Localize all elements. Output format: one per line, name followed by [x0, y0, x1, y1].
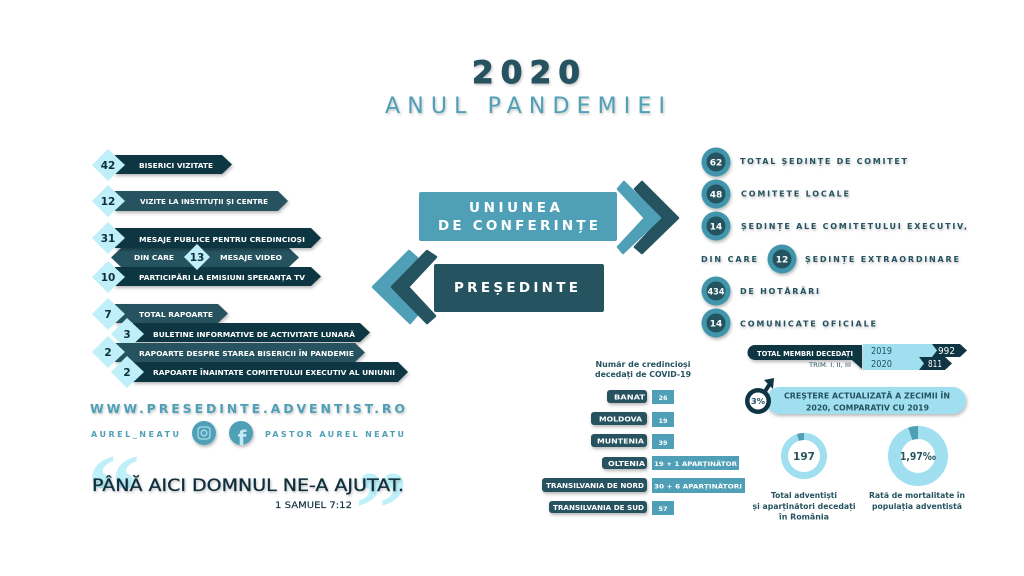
icon: up arrow circle: [745, 378, 774, 414]
stat: 62: 62: [710, 158, 722, 168]
panel: deceased members comparison: TRIM. I, II, III: [808, 362, 851, 369]
panel: reports: [92, 298, 408, 388]
arrow: right chevrons: [618, 182, 678, 253]
chart: donut 197: și aparținători decedați: [752, 502, 856, 512]
stat: 48: 48: [710, 190, 722, 200]
heading: regions: [595, 360, 691, 380]
quote: [87, 433, 408, 567]
stat: 434: DE HOTĂRÂRI: [740, 285, 819, 296]
heading: regions: decedați de COVID-19: [595, 370, 691, 380]
bar: rapoarte comitet: 2: [123, 367, 131, 379]
panel: deceased members comparison: TOTAL MEMBRI DECEDAȚI: [757, 350, 853, 359]
panel: uniunea de conferinte: UNIUNEA: [469, 200, 561, 216]
row: transilvania de sud: 57: [658, 505, 668, 513]
stat: 14 comunicate: [702, 308, 876, 338]
chart: donut 197: în România: [778, 512, 829, 522]
stat: 12 extraordinare: DIN CARE: [701, 255, 757, 264]
row: transilvania de nord: 30 + 6 APARȚINĂTORI: [654, 482, 742, 492]
title: [385, 55, 665, 119]
bar: rapoarte stare: 2: [104, 347, 112, 359]
row: transilvania de nord: [542, 478, 745, 493]
panel: deceased members comparison: [748, 344, 967, 370]
row: banat: [607, 390, 674, 404]
row: muntenia: [591, 434, 674, 449]
bar: participari: PARTICIPĂRI LA EMISIUNI SPERANȚA TV: [139, 273, 306, 283]
quote: PÂNĂ AICI DOMNUL NE-A AJUTAT.: [92, 474, 404, 496]
panel: deaths by region: [542, 360, 745, 515]
title: ANUL PANDEMIEI: [385, 94, 665, 119]
chart: donut 197: 197: [793, 451, 815, 463]
social links: [91, 421, 404, 450]
row: transilvania de sud: TRANSILVANIA DE SUD: [553, 504, 644, 512]
icon: facebook: f: [238, 426, 247, 450]
quote: ”: [355, 450, 408, 567]
stat: 14 comunicate: 14: [710, 320, 722, 330]
stat: 62: [702, 148, 908, 176]
title: 2020: [472, 55, 580, 91]
bar: rapoarte stare: RAPOARTE DESPRE STAREA BISERICII ÎN PANDEMIE: [139, 349, 354, 358]
stat: 14 sedinte: 14: [710, 222, 722, 232]
chart: donut 197: Total adventiști: [771, 491, 837, 501]
bar: din care mesaje video: DIN CARE: [134, 254, 174, 262]
bar: participari: 10: [101, 272, 115, 284]
chart: donut mortality: [869, 432, 965, 512]
badge: 13: [184, 244, 210, 270]
bar: biserici vizitate: BISERICI VIZITATE: [139, 162, 213, 170]
stat: 12 extraordinare: 12: [776, 256, 788, 266]
panel: deceased members comparison: 811: [928, 359, 942, 370]
row: transilvania de sud: [549, 501, 674, 515]
quote: 1 SAMUEL 7:12: [275, 501, 352, 511]
row: muntenia: MUNTENIA: [597, 438, 645, 446]
arrow: left chevrons: [373, 251, 436, 323]
row: oltenia: OLTENIA: [608, 460, 646, 468]
row: muntenia: 39: [658, 439, 668, 447]
social links: PASTOR AUREL NEATU: [265, 430, 404, 439]
row: moldova: [591, 412, 674, 427]
bar: vizite: 12: [101, 196, 115, 208]
panel: deceased members comparison: 2020: [871, 359, 892, 370]
bar: participari: [92, 261, 321, 293]
row: transilvania de nord: TRANSILVANIA DE NORD: [546, 482, 644, 490]
panel: presedinte: [373, 251, 604, 323]
panel: deceased members comparison: 2019: [871, 346, 892, 357]
bar: vizite: VIZITE LA INSTITUȚII ȘI CENTRE: [140, 198, 268, 207]
stat: 48: COMITETE LOCALE: [741, 190, 849, 198]
bar: total rapoarte: TOTAL RAPOARTE: [139, 311, 213, 319]
quote: “: [87, 433, 140, 550]
panel: presedinte: PREȘEDINTE: [454, 280, 578, 296]
bar: rapoarte comitet: [111, 356, 408, 388]
bar: biserici vizitate: [92, 149, 232, 181]
stat: 12 extraordinare: ȘEDINȚE EXTRAORDINARE: [805, 255, 959, 265]
icon: instagram: [192, 421, 216, 445]
badge: 13: 13: [190, 252, 204, 264]
stat: 14 sedinte: [702, 212, 967, 240]
bar: buletine: [111, 318, 370, 350]
bar: vizite: [92, 185, 288, 217]
bar: din care mesaje video: [111, 248, 299, 267]
website: WWW.PRESEDINTE.ADVENTIST.RO: [90, 401, 405, 416]
row: oltenia: [602, 456, 739, 470]
callout: 3% growth: [745, 378, 966, 414]
chart: donut mortality: populația adventistă: [872, 502, 962, 512]
bar: total rapoarte: [92, 298, 228, 330]
callout: 3% growth: CREȘTERE ACTUALIZATĂ A ZECIMII ÎN: [784, 390, 950, 402]
stat: 434: [702, 276, 819, 306]
bar: mesaje publice: 31: [101, 233, 115, 245]
row: moldova: 19: [658, 417, 668, 425]
stat: 434: 434: [708, 288, 724, 298]
bar: total rapoarte: 7: [104, 309, 112, 321]
bar: buletine: 3: [123, 329, 131, 341]
bar: biserici vizitate: 42: [101, 160, 115, 172]
stat: 48: [702, 180, 849, 208]
stat: 12 extraordinare: [701, 244, 959, 274]
bar: mesaje publice: MESAJE PUBLICE PENTRU CREDINCIOȘI: [139, 236, 305, 244]
stat: 14 sedinte: ȘEDINȚE ALE COMITETULUI EXECUTIV,: [741, 222, 967, 232]
bar: rapoarte stare: [92, 336, 365, 368]
stat: 14 comunicate: COMUNICATE OFICIALE: [740, 320, 876, 328]
stat: 62: TOTAL ȘEDINȚE DE COMITET: [740, 157, 908, 167]
heading: regions: Număr de credincioși: [596, 360, 691, 370]
panel: deceased members comparison: 992: [938, 346, 955, 357]
row: oltenia: 19 + 1 APARȚINĂTOR: [654, 459, 737, 469]
panel: committee stats: [701, 148, 967, 338]
row: moldova: MOLDOVA: [599, 416, 643, 424]
row: banat: BANAT: [614, 394, 645, 402]
callout: 3% growth: 2020, COMPARATIV CU 2019: [806, 404, 929, 412]
icon: facebook: [229, 421, 253, 450]
icon: up arrow circle: 3%: [751, 397, 766, 406]
bar: din care mesaje video: MESAJE VIDEO: [220, 254, 282, 262]
chart: donut 197: [752, 436, 856, 522]
bar: rapoarte comitet: RAPOARTE ÎNAINTATE COMITETULUI EXECUTIV AL UNIUNII: [153, 368, 395, 377]
panel: visits and messages: [92, 149, 321, 293]
bar: buletine: BULETINE INFORMATIVE DE ACTIVITATE LUNARĂ: [153, 330, 356, 339]
panel: uniunea de conferinte: [419, 182, 678, 253]
chart: donut mortality: 1,97‰: [900, 451, 936, 463]
row: banat: 26: [658, 394, 668, 402]
panel: uniunea de conferinte: DE CONFERINȚE: [438, 218, 598, 234]
bar: mesaje publice: [92, 222, 321, 254]
chart: donut mortality: Rată de mortalitate în: [869, 491, 965, 500]
social links: AUREL_NEATU: [91, 430, 179, 439]
